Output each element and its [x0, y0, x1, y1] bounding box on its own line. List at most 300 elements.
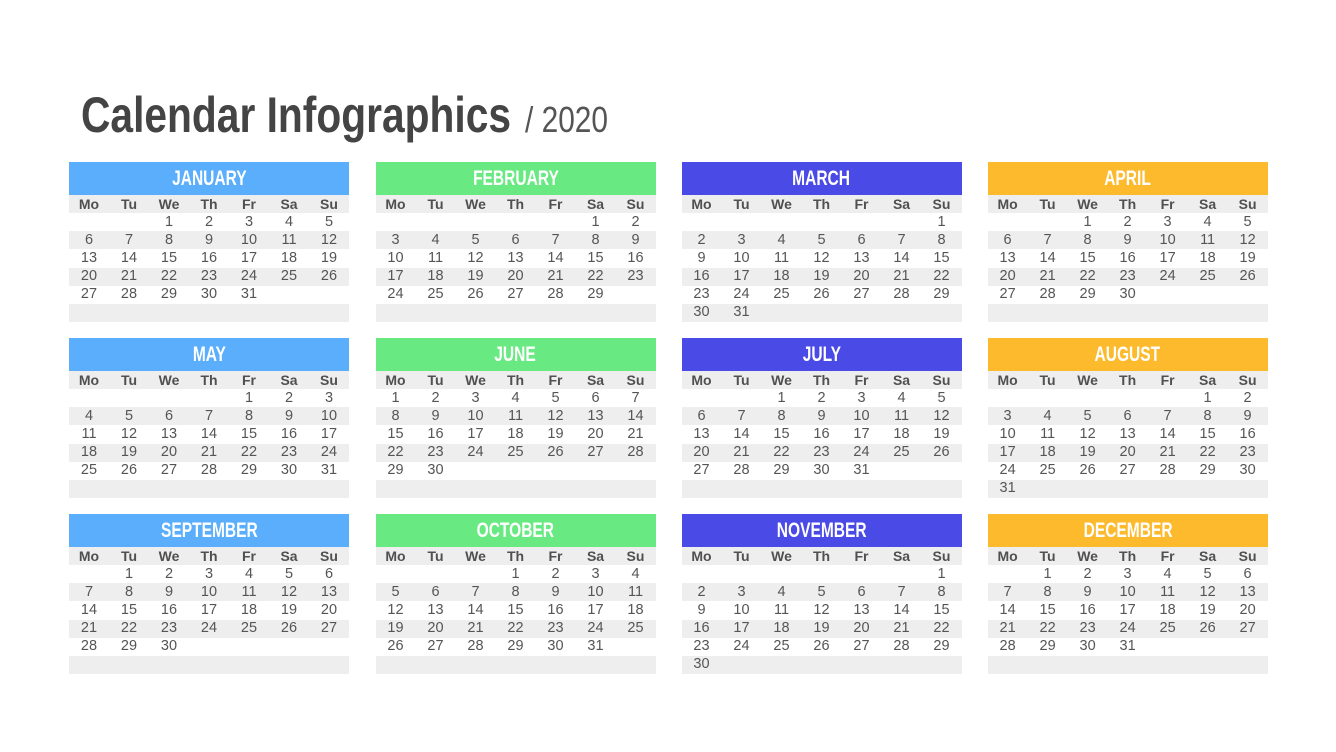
calendar table: June: 24: [467, 444, 484, 460]
calendar table: January: 26: [321, 268, 337, 284]
calendar table: August: 6: [1124, 408, 1132, 424]
calendar table: November: 7: [897, 584, 906, 600]
calendar table: July: 12: [933, 408, 950, 424]
calendar table: September: 5: [285, 566, 293, 582]
calendar table: September: 18: [241, 602, 257, 618]
calendar table: April: 4: [1204, 214, 1212, 230]
calendar table: March: 25: [773, 286, 790, 302]
calendar table: June: 22: [387, 444, 404, 460]
calendar table: June: 12: [547, 408, 564, 424]
calendar table: September: 27: [321, 620, 337, 636]
calendar table: March: 15: [933, 250, 950, 266]
calendar table: August: [988, 371, 1268, 498]
calendar table: January: 24: [241, 268, 257, 284]
calendar table: June: 6: [591, 390, 600, 406]
calendar table: October: 12: [387, 602, 404, 618]
calendar table: April: 14: [1040, 250, 1056, 266]
calendar table: July: Th: [813, 372, 830, 388]
calendar table: November: Fr: [854, 548, 868, 564]
calendar table: February: 24: [387, 286, 404, 302]
calendar table: September: 4: [245, 566, 253, 582]
calendar table: March: 19: [813, 268, 830, 284]
calendar table: May: 15: [241, 426, 257, 442]
calendar table: April: 17: [1160, 250, 1176, 266]
calendar table: April: 8: [1084, 232, 1092, 248]
calendar table: December: 23: [1080, 620, 1096, 636]
calendar table: November: [682, 547, 962, 674]
calendar table: February: 2: [631, 214, 640, 230]
calendar table: November: 27: [853, 638, 870, 654]
calendar table: October: We: [465, 548, 486, 564]
calendar table: June: Th: [507, 372, 524, 388]
calendar table: October: 11: [628, 584, 643, 600]
calendar table: January: 29: [161, 286, 177, 302]
calendar table: June: 16: [427, 426, 444, 442]
calendar table: August: 17: [1000, 444, 1016, 460]
calendar table: November: Sa: [893, 548, 910, 564]
calendar table: October: 14: [467, 602, 484, 618]
calendar table: February: 15: [587, 250, 604, 266]
calendar table: December: 6: [1244, 566, 1252, 582]
calendar table: May: 31: [321, 462, 337, 478]
calendar table: July: 24: [853, 444, 870, 460]
calendar table: February: 4: [431, 232, 440, 248]
calendar table: August: 3: [1004, 408, 1012, 424]
calendar table: March: 14: [893, 250, 910, 266]
calendar table: February: Tu: [427, 196, 444, 212]
calendar table: January: 14: [121, 250, 137, 266]
calendar table: May: 9: [285, 408, 293, 424]
calendar table: October: 6: [431, 584, 440, 600]
calendar table: December: 25: [1160, 620, 1176, 636]
calendar table: March: 5: [817, 232, 826, 248]
calendar table: November: 13: [853, 602, 870, 618]
calendar table: April: 22: [1080, 268, 1096, 284]
calendar table: September: 25: [241, 620, 257, 636]
calendar table: June: 3: [471, 390, 480, 406]
month heading: July: [682, 338, 962, 371]
month heading: February: FEBRUARY: [473, 167, 558, 190]
calendar table: December: 24: [1120, 620, 1136, 636]
calendar table: July: 28: [733, 462, 750, 478]
calendar table: August: 13: [1120, 426, 1136, 442]
calendar table: June: Mo: [385, 372, 406, 388]
calendar table: April: 7: [1044, 232, 1052, 248]
calendar table: August: 20: [1120, 444, 1136, 460]
calendar table: June: 21: [627, 426, 644, 442]
calendar table: January: 23: [201, 268, 217, 284]
calendar table: May: 10: [321, 408, 337, 424]
calendar table: September: Tu: [121, 548, 137, 564]
calendar table: April: 23: [1120, 268, 1136, 284]
calendar table: June: 10: [467, 408, 484, 424]
calendar table: May: 11: [81, 426, 97, 442]
calendar table: February: 25: [427, 286, 444, 302]
calendar table: January: 19: [321, 250, 337, 266]
calendar table: January: 21: [121, 268, 137, 284]
calendar table: July: 2: [817, 390, 826, 406]
calendar table: March: 2: [697, 232, 706, 248]
calendar table: December: 16: [1080, 602, 1096, 618]
calendar table: June: We: [465, 372, 486, 388]
calendar table: May: Mo: [79, 372, 99, 388]
calendar table: December: 7: [1004, 584, 1012, 600]
calendar table: August: 26: [1080, 462, 1096, 478]
calendar table: December: 17: [1120, 602, 1136, 618]
calendar table: June: 27: [587, 444, 604, 460]
calendar table: September: 23: [161, 620, 177, 636]
month heading: September: SEPTEMBER: [161, 519, 257, 542]
calendar table: February: 17: [387, 268, 404, 284]
calendar table: August: 24: [1000, 462, 1016, 478]
calendar table: April: 3: [1164, 214, 1172, 230]
panel: September: [69, 514, 349, 674]
calendar table: May: 23: [281, 444, 297, 460]
calendar table: August: Tu: [1040, 372, 1056, 388]
calendar table: November: Su: [933, 548, 950, 564]
calendar table: September: 9: [165, 584, 173, 600]
calendar table: July: 30: [813, 462, 830, 478]
calendar table: December: 29: [1040, 638, 1056, 654]
calendar table: July: 25: [893, 444, 910, 460]
calendar table: January: 18: [281, 250, 297, 266]
calendar table: November: 18: [773, 620, 790, 636]
calendar table: November: 9: [697, 602, 706, 618]
calendar table: October: 18: [627, 602, 644, 618]
calendar table: June: 19: [547, 426, 564, 442]
calendar table: November: Tu: [733, 548, 750, 564]
calendar table: April: Fr: [1161, 196, 1175, 212]
month heading: April: APRIL: [1104, 167, 1151, 190]
calendar table: December: 30: [1080, 638, 1096, 654]
calendar table: August: 19: [1080, 444, 1096, 460]
calendar table: July: 5: [937, 390, 946, 406]
panel: March: [682, 162, 962, 322]
calendar table: December: 5: [1204, 566, 1212, 582]
calendar table: October: 10: [587, 584, 604, 600]
calendar table: October: 9: [551, 584, 560, 600]
calendar table: May: Fr: [242, 372, 256, 388]
calendar table: July: 4: [897, 390, 906, 406]
calendar table: September: Sa: [280, 548, 298, 564]
calendar table: December: 18: [1160, 602, 1176, 618]
calendar table: March: 12: [813, 250, 830, 266]
calendar table: August: 11: [1040, 426, 1055, 442]
calendar table: May: 28: [201, 462, 217, 478]
calendar table: August: 12: [1080, 426, 1096, 442]
calendar table: October: 24: [587, 620, 604, 636]
calendar table: November: 2: [697, 584, 706, 600]
calendar table: March: 21: [893, 268, 910, 284]
calendar table: November: 25: [773, 638, 790, 654]
month heading: October: [376, 514, 656, 547]
calendar table: July: 23: [813, 444, 830, 460]
calendar table: December: [988, 547, 1268, 674]
calendar table: September: 3: [205, 566, 213, 582]
calendar table: March: Su: [933, 196, 950, 212]
calendar table: December: 10: [1120, 584, 1136, 600]
calendar table: January: 1: [165, 214, 173, 230]
calendar table: September: 15: [121, 602, 137, 618]
calendar table: October: Th: [507, 548, 524, 564]
calendar table: November: 5: [817, 584, 826, 600]
month heading: November: [682, 514, 962, 547]
calendar table: February: 14: [547, 250, 564, 266]
calendar table: December: 22: [1040, 620, 1056, 636]
calendar table: October: 28: [467, 638, 484, 654]
calendar table: November: We: [771, 548, 792, 564]
calendar table: October: 20: [427, 620, 444, 636]
calendar table: December: 4: [1164, 566, 1172, 582]
calendar table: November: Mo: [691, 548, 712, 564]
calendar table: July: 29: [773, 462, 790, 478]
calendar table: June: Sa: [587, 372, 604, 388]
calendar table: July: 31: [853, 462, 870, 478]
calendar table: August: Th: [1119, 372, 1136, 388]
calendar table: January: 13: [81, 250, 97, 266]
calendar table: April: Tu: [1040, 196, 1056, 212]
calendar table: January: 30: [201, 286, 217, 302]
calendar table: April: 13: [1000, 250, 1016, 266]
calendar table: June: 23: [427, 444, 444, 460]
calendar table: August: 30: [1240, 462, 1256, 478]
calendar table: July: 1: [777, 390, 786, 406]
calendar table: June: 4: [511, 390, 520, 406]
calendar table: March: 29: [933, 286, 950, 302]
calendar table: December: 13: [1240, 584, 1256, 600]
calendar table: July: 9: [817, 408, 826, 424]
calendar table: May: 4: [85, 408, 93, 424]
calendar table: January: 8: [165, 232, 173, 248]
calendar table: December: Su: [1239, 548, 1257, 564]
calendar table: April: 20: [1000, 268, 1016, 284]
calendar table: December: 20: [1240, 602, 1256, 618]
calendar table: September: 17: [201, 602, 217, 618]
calendar table: December: 26: [1200, 620, 1216, 636]
calendar table: May: 27: [161, 462, 177, 478]
calendar table: January: [69, 195, 349, 322]
calendar table: September: [69, 547, 349, 674]
calendar table: September: 21: [81, 620, 97, 636]
calendar table: March: 4: [777, 232, 786, 248]
calendar table: October: 30: [547, 638, 564, 654]
calendar table: November: 19: [813, 620, 830, 636]
calendar table: June: 9: [431, 408, 440, 424]
calendar table: January: 11: [281, 232, 297, 248]
calendar table: May: 26: [121, 462, 137, 478]
calendar table: September: 26: [281, 620, 297, 636]
calendar table: April: Sa: [1199, 196, 1216, 212]
calendar table: April: 29: [1080, 286, 1096, 302]
calendar table: August: 15: [1200, 426, 1216, 442]
calendar table: June: 13: [587, 408, 604, 424]
calendar table: May: 21: [201, 444, 217, 460]
calendar table: January: 5: [325, 214, 333, 230]
calendar table: February: Sa: [587, 196, 604, 212]
calendar table: March: Th: [813, 196, 830, 212]
calendar table: July: 3: [857, 390, 866, 406]
calendar table: May: 17: [321, 426, 337, 442]
calendar table: December: 12: [1200, 584, 1216, 600]
calendar table: December: 21: [1000, 620, 1016, 636]
calendar table: April: 28: [1040, 286, 1056, 302]
calendar table: September: 2: [165, 566, 173, 582]
calendar table: October: Sa: [587, 548, 604, 564]
calendar table: March: 1: [937, 214, 946, 230]
calendar table: September: Mo: [79, 548, 99, 564]
calendar table: February: Fr: [548, 196, 562, 212]
calendar table: March: 23: [693, 286, 710, 302]
calendar table: August: 29: [1200, 462, 1216, 478]
calendar table: March: 3: [737, 232, 746, 248]
calendar table: March: 9: [697, 250, 706, 266]
calendar table: March: 18: [773, 268, 790, 284]
calendar table: January: 31: [241, 286, 257, 302]
calendar table: December: Th: [1119, 548, 1136, 564]
calendar table: April: 10: [1160, 232, 1176, 248]
panel: February: [376, 162, 656, 322]
calendar table: November: 24: [733, 638, 750, 654]
calendar table: June: 1: [391, 390, 400, 406]
calendar table: August: Su: [1239, 372, 1257, 388]
calendar table: June: 11: [508, 408, 523, 424]
calendar table: February: Th: [507, 196, 524, 212]
calendar table: April: Mo: [997, 196, 1018, 212]
month heading: March: MARCH: [793, 167, 850, 190]
calendar table: June: Fr: [548, 372, 562, 388]
calendar table: October: 8: [511, 584, 520, 600]
calendar table: January: 22: [161, 268, 177, 284]
calendar table: July: 13: [693, 426, 710, 442]
calendar table: August: Mo: [997, 372, 1018, 388]
month heading: August: [988, 338, 1268, 371]
calendar table: January: Th: [200, 196, 218, 212]
calendar table: June: 15: [387, 426, 404, 442]
calendar table: December: 8: [1044, 584, 1052, 600]
calendar table: July: 8: [777, 408, 786, 424]
calendar table: November: 17: [733, 620, 750, 636]
calendar table: October: [376, 547, 656, 674]
calendar table: April: 6: [1004, 232, 1012, 248]
calendar table: June: 18: [507, 426, 524, 442]
calendar table: March: [682, 195, 962, 322]
calendar table: June: 8: [391, 408, 400, 424]
calendar table: January: 7: [125, 232, 133, 248]
calendar table: October: 29: [507, 638, 524, 654]
calendar table: January: 15: [161, 250, 177, 266]
calendar table: May: 5: [125, 408, 133, 424]
calendar table: July: 18: [893, 426, 910, 442]
month heading: December: [988, 514, 1268, 547]
calendar table: April: 18: [1200, 250, 1216, 266]
calendar table: February: 23: [627, 268, 644, 284]
calendar table: November: 20: [853, 620, 870, 636]
calendar table: July: [682, 371, 962, 498]
calendar table: July: 20: [693, 444, 710, 460]
calendar table: October: 13: [427, 602, 444, 618]
calendar table: November: 21: [893, 620, 910, 636]
calendar table: February: 18: [427, 268, 444, 284]
calendar table: May: 12: [121, 426, 137, 442]
calendar table: July: Sa: [893, 372, 910, 388]
calendar table: January: Fr: [242, 196, 256, 212]
calendar table: November: 14: [893, 602, 910, 618]
calendar table: December: Sa: [1199, 548, 1216, 564]
panel: July: [682, 338, 962, 498]
month heading: September: [69, 514, 349, 547]
calendar table: February: 26: [467, 286, 484, 302]
calendar table: February: 22: [587, 268, 604, 284]
calendar table: October: Mo: [385, 548, 406, 564]
calendar table: May: 29: [241, 462, 257, 478]
calendar table: January: Mo: [79, 196, 99, 212]
calendar table: April: 9: [1124, 232, 1132, 248]
calendar table: August: 1: [1204, 390, 1212, 406]
calendar table: September: 20: [321, 602, 337, 618]
calendar table: June: 17: [467, 426, 484, 442]
calendar table: July: 11: [894, 408, 909, 424]
calendar table: August: 22: [1200, 444, 1216, 460]
calendar table: July: 22: [773, 444, 790, 460]
calendar table: August: 8: [1204, 408, 1212, 424]
calendar table: February: Mo: [385, 196, 406, 212]
calendar table: March: 20: [853, 268, 870, 284]
calendar table: June: 28: [627, 444, 644, 460]
calendar table: June: 7: [631, 390, 640, 406]
calendar table: March: 10: [733, 250, 750, 266]
calendar table: May: 25: [81, 462, 97, 478]
calendar table: July: Fr: [854, 372, 868, 388]
calendar table: June: Tu: [427, 372, 444, 388]
calendar table: July: 7: [737, 408, 746, 424]
panel: November: [682, 514, 962, 674]
calendar table: September: 22: [121, 620, 137, 636]
calendar table: November: 6: [857, 584, 866, 600]
calendar table: October: 1: [511, 566, 520, 582]
calendar table: May: 1: [245, 390, 253, 406]
calendar table: July: 17: [853, 426, 870, 442]
calendar table: October: Fr: [548, 548, 562, 564]
calendar table: November: 11: [774, 602, 789, 618]
panel: January: [69, 162, 349, 322]
calendar table: June: 26: [547, 444, 564, 460]
calendar table: April: 1: [1084, 214, 1092, 230]
calendar table: September: 28: [81, 638, 97, 654]
calendar table: May: 7: [205, 408, 213, 424]
calendar table: September: 7: [85, 584, 93, 600]
calendar table: March: We: [771, 196, 792, 212]
calendar table: October: 16: [547, 602, 564, 618]
calendar table: April: 2: [1124, 214, 1132, 230]
month heading: October: OCTOBER: [477, 519, 554, 542]
calendar table: January: 2: [205, 214, 213, 230]
panel: October: [376, 514, 656, 674]
calendar table: December: 9: [1084, 584, 1092, 600]
calendar table: January: 12: [321, 232, 337, 248]
calendar table: February: 19: [467, 268, 484, 284]
calendar table: November: 16: [693, 620, 710, 636]
calendar table: October: 3: [591, 566, 600, 582]
calendar table: May: [69, 371, 349, 498]
calendar table: August: We: [1077, 372, 1098, 388]
calendar table: December: Tu: [1040, 548, 1056, 564]
month heading: June: JUNE: [495, 343, 536, 366]
calendar table: November: 29: [933, 638, 950, 654]
calendar table: February: [376, 195, 656, 322]
calendar table: June: 30: [427, 462, 444, 478]
calendar table: November: 12: [813, 602, 830, 618]
calendar table: January: 25: [281, 268, 297, 284]
